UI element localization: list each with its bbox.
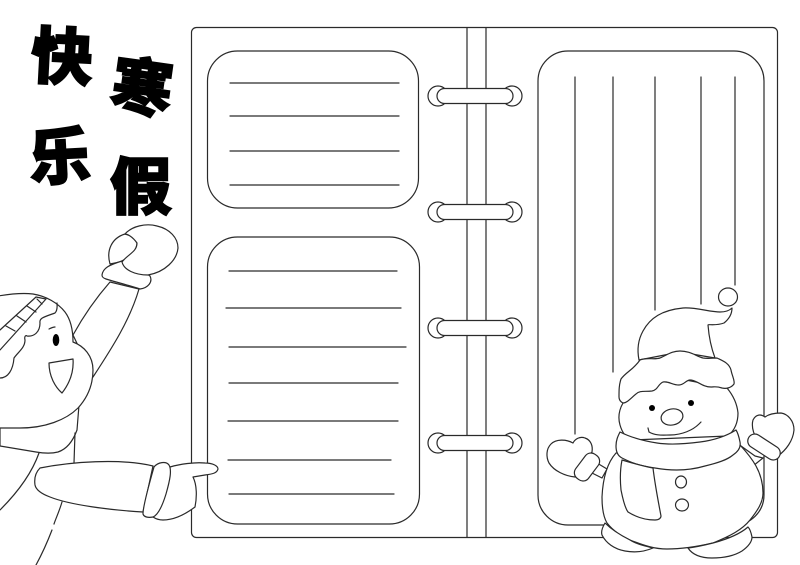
hat brim [619, 351, 734, 403]
smile [648, 422, 701, 435]
mouth [49, 359, 73, 393]
left mitten [547, 437, 602, 484]
binder rings [428, 86, 522, 453]
panel: lower left writing area [208, 237, 420, 524]
right foot [688, 527, 752, 558]
panel: top left writing area [208, 51, 418, 208]
scarf and body lines [0, 405, 79, 453]
body [602, 445, 763, 549]
snowman [547, 288, 794, 558]
panel: right writing area [538, 51, 764, 525]
raised mitten and snowball [102, 225, 178, 289]
scarf tail [620, 460, 661, 520]
title: 快乐寒假: 乐 [27, 122, 93, 195]
right arm [741, 446, 763, 466]
scarf [616, 430, 740, 470]
left arm [592, 463, 607, 478]
title: 快乐寒假: 快 [29, 22, 95, 95]
child character [0, 225, 218, 565]
title: 快乐寒假: 假 [110, 154, 172, 223]
notebook [192, 28, 778, 538]
pointing arm [35, 462, 218, 520]
nose [660, 407, 684, 427]
eye [53, 334, 59, 346]
head [0, 294, 93, 428]
buttons [676, 476, 688, 511]
pompom [718, 288, 738, 306]
eyes [649, 400, 694, 411]
left foot [602, 523, 653, 552]
hat top [638, 308, 732, 360]
head [619, 375, 738, 440]
right mitten [745, 413, 794, 463]
title: 快乐寒假: 寒 [106, 51, 177, 128]
title: 快乐寒假 [27, 22, 177, 223]
hat fringe [0, 303, 57, 378]
eyebrow [49, 327, 55, 329]
raised arm [73, 282, 139, 377]
knit hat band [0, 297, 46, 350]
